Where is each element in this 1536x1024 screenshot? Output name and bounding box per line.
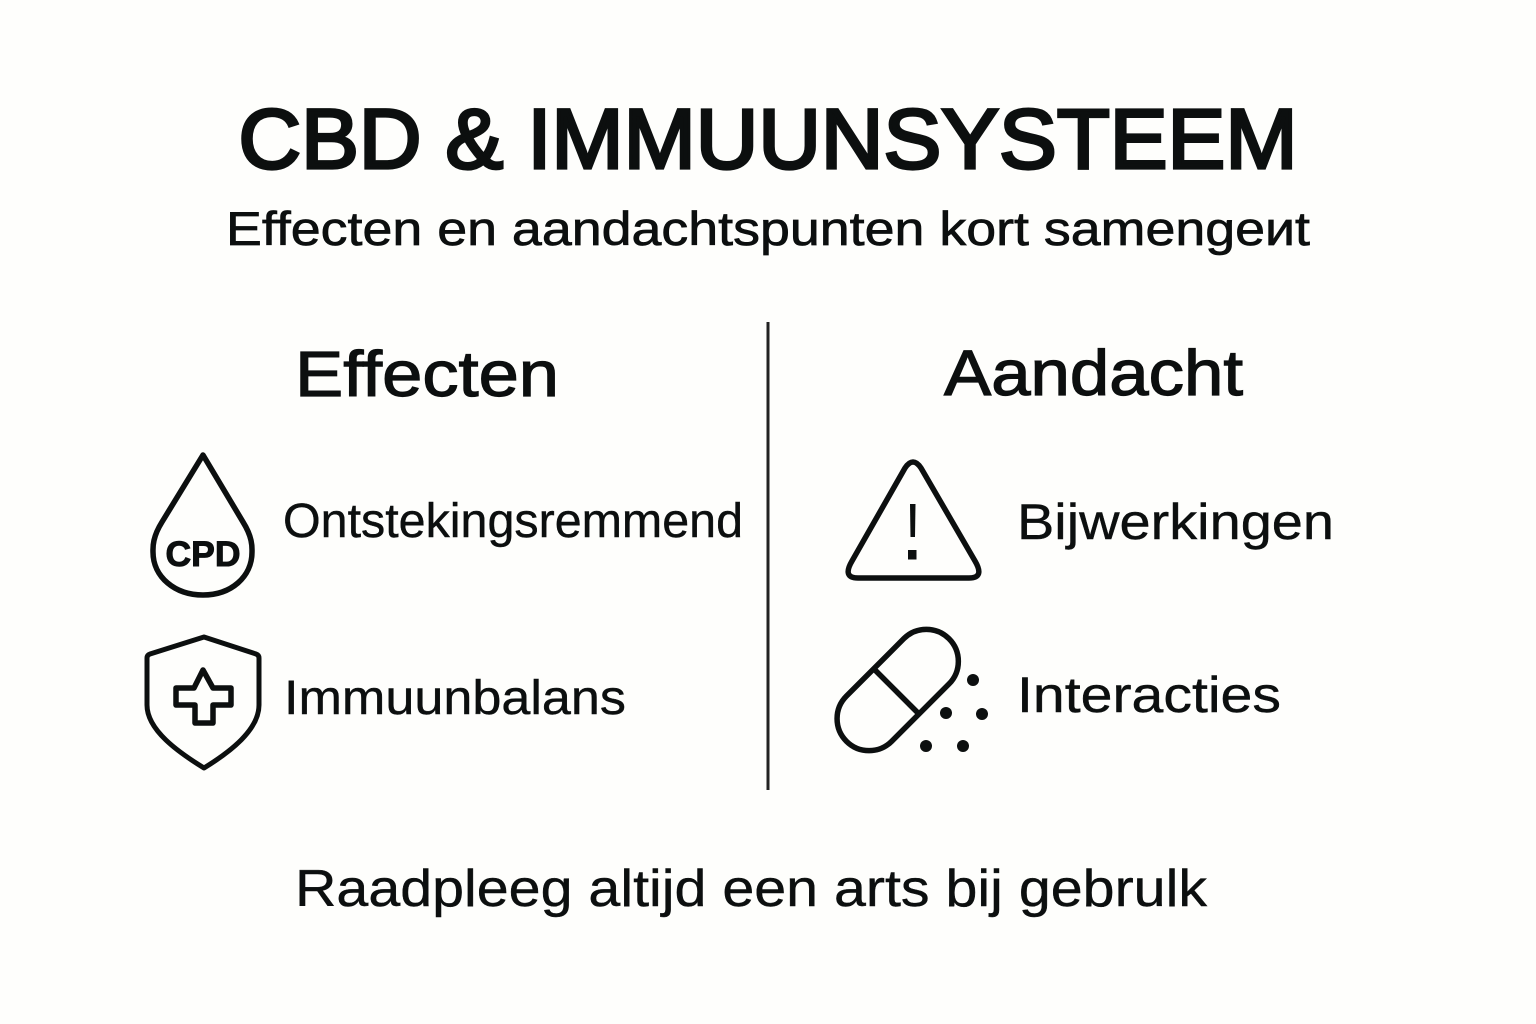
icon: CBD drop: CPD	[166, 535, 240, 574]
panel: effecten	[147, 338, 743, 768]
label: bijwerkingen: Bijwerkingen	[1017, 494, 1334, 550]
icon: CBD drop	[153, 455, 252, 595]
icon: shield with cross	[147, 637, 259, 768]
label: ontstekingsremmend: Ontstekingsremmend	[283, 495, 743, 548]
icon: warning triangle	[848, 462, 979, 578]
central divider	[766, 322, 770, 790]
heading: aandacht: Aandacht	[944, 337, 1243, 409]
subtitle: Effecten en aandachtspunten kort samengeиt	[226, 202, 1310, 255]
panel: aandacht	[824, 337, 1334, 764]
label: immuunbalans: Immuunbalans	[284, 672, 626, 725]
title: CBD & IMMUUNSYSTEEM	[238, 92, 1298, 186]
label: interacties: Interacties	[1017, 667, 1281, 723]
heading: effecten: Effecten	[295, 338, 559, 410]
footer note: Raadpleeg altijd een arts bij gebrulk	[295, 860, 1208, 918]
icon: capsule with dots	[824, 616, 988, 764]
